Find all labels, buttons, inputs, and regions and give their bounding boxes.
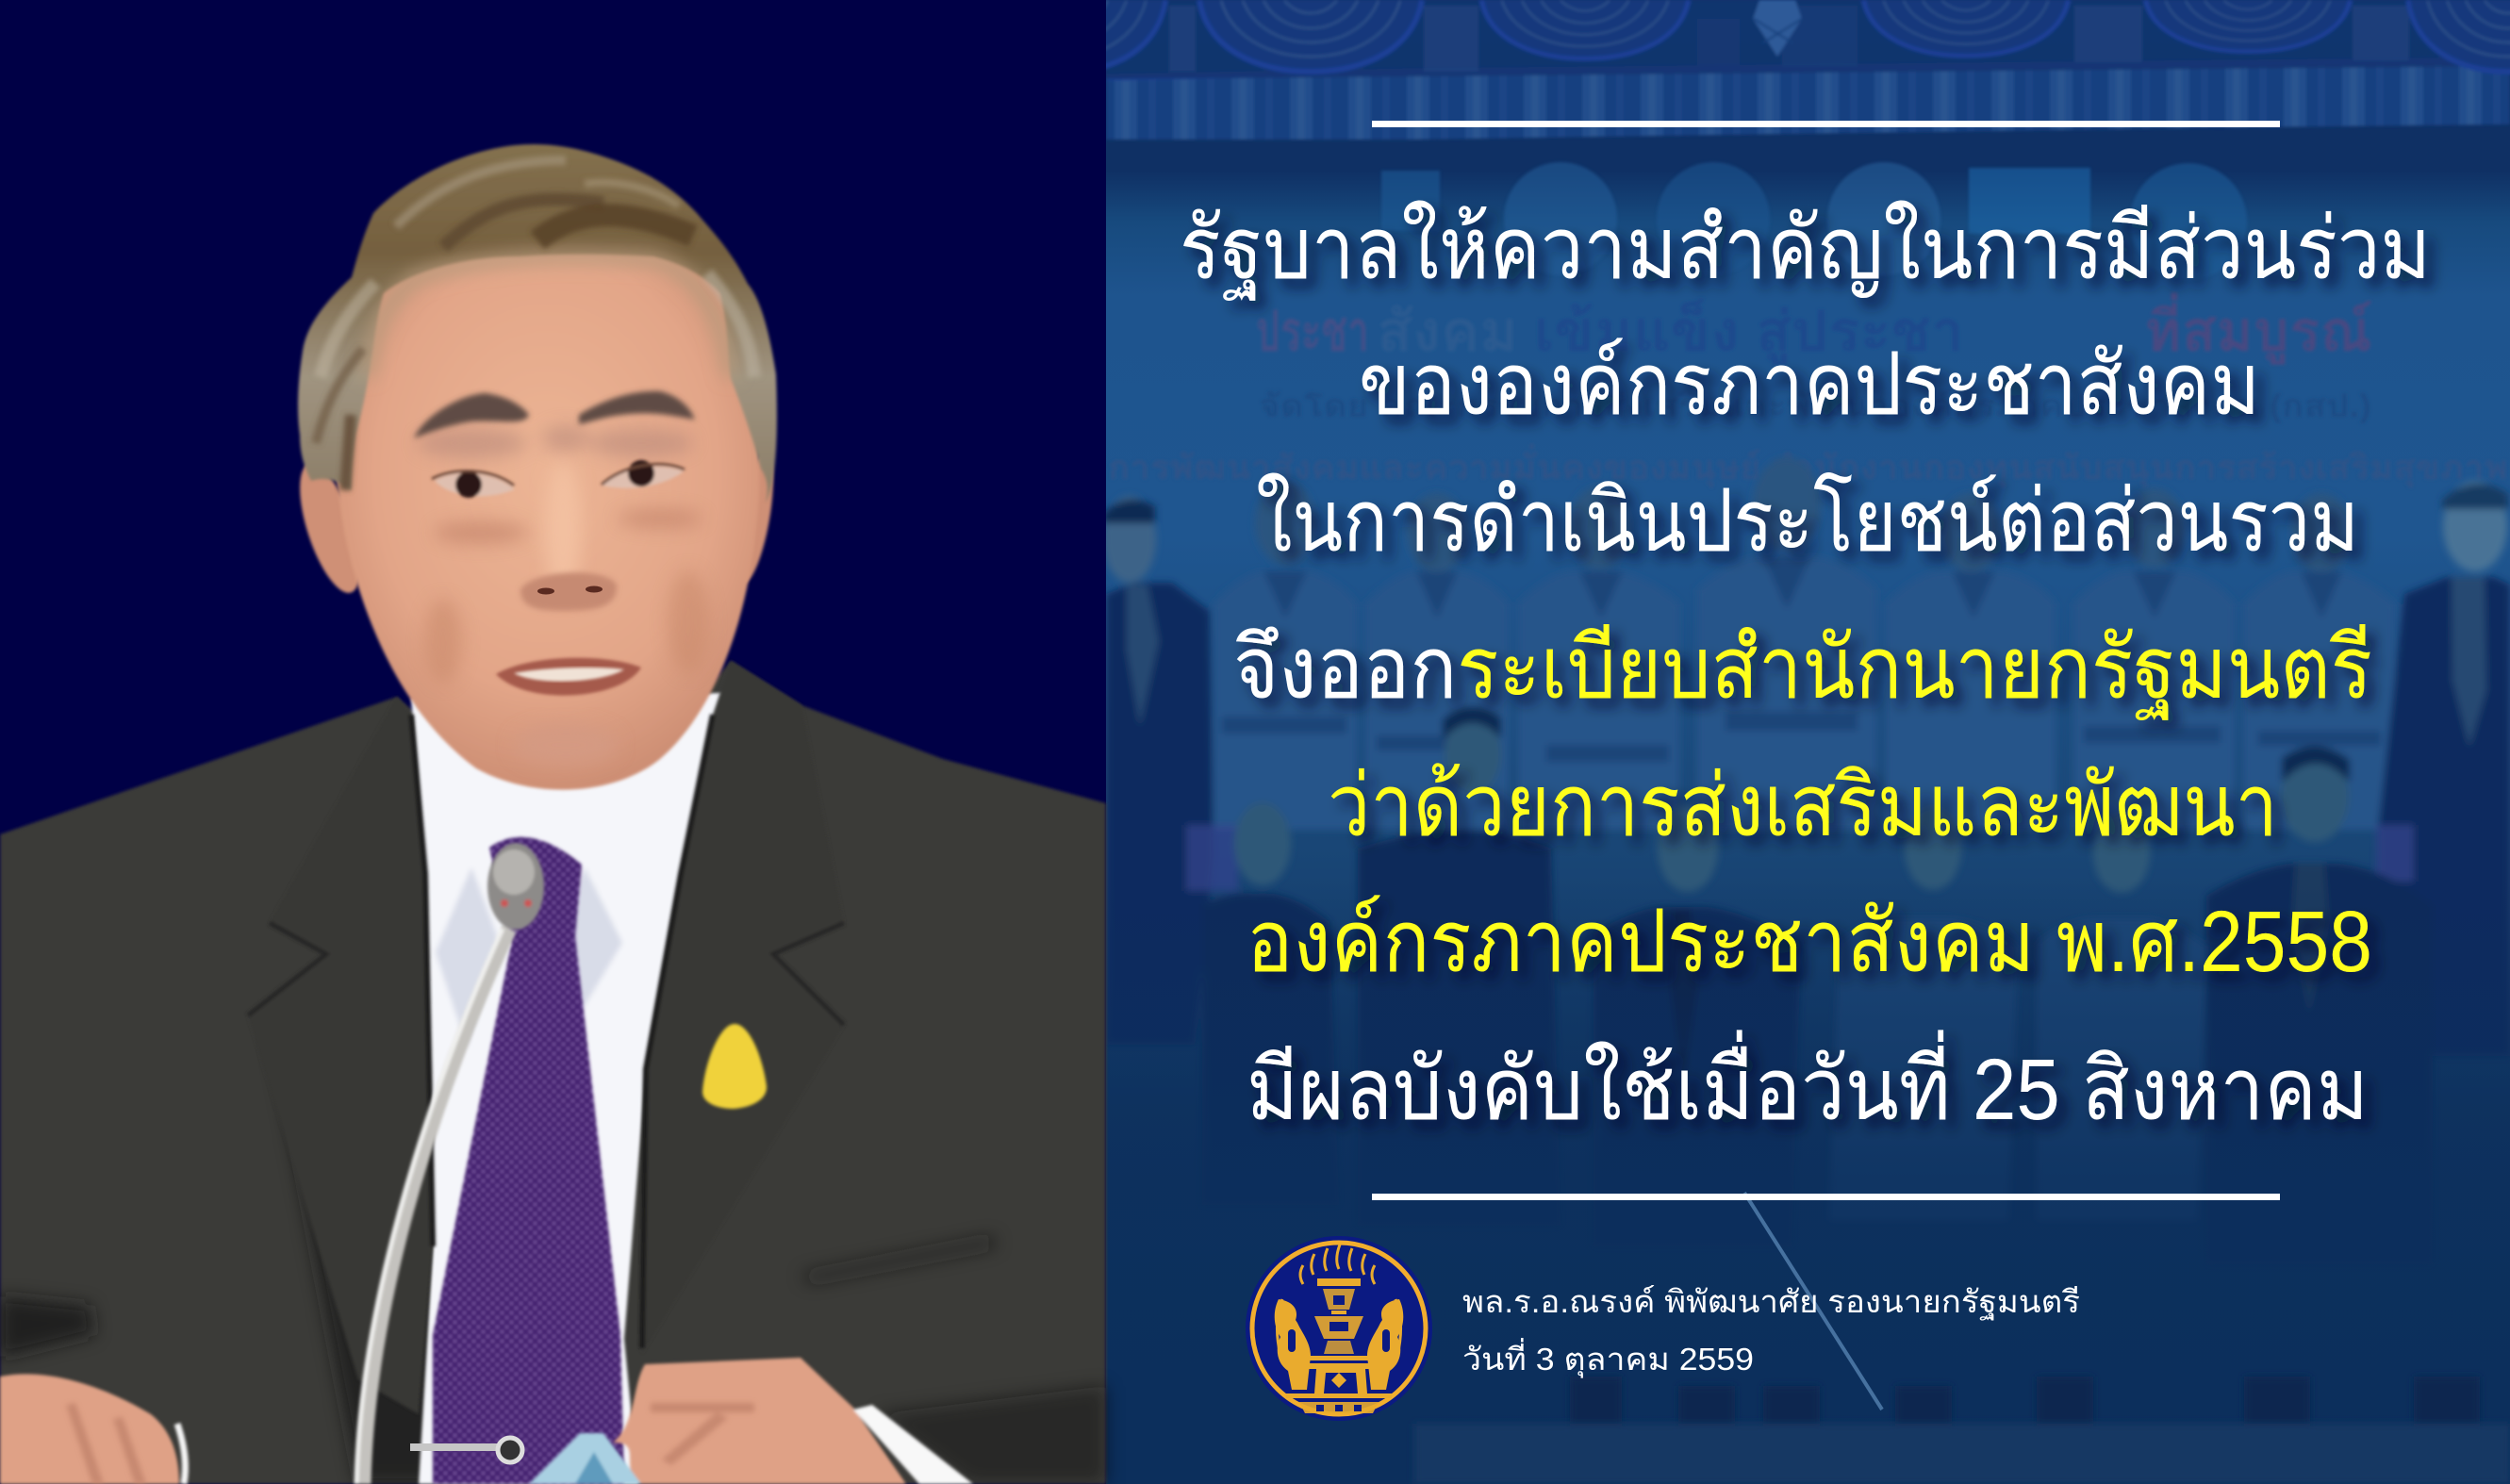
microphone [356,843,544,1484]
back row heads [1255,457,2352,572]
heading: main statement [1180,201,2431,1138]
icon: government seal [1246,1236,1432,1421]
banner text in photo: เข้มแข็ง สู่ประชา [1534,298,1964,365]
logos row [1381,162,2247,280]
hair [298,144,777,503]
eye sockets [417,425,702,544]
attribution date: วันที่ 3 ตุลาคม 2559 [1462,1338,1754,1378]
curtain [966,0,2510,140]
side men in dark suits [1106,583,1214,1045]
banner text in photo [1108,292,2508,488]
ears [288,451,781,600]
floor and feet [1414,1377,2510,1484]
jacket [0,661,1106,1484]
face [334,244,760,790]
people [1106,458,2510,1145]
panel: portrait background [0,0,1106,1484]
facial features [414,391,709,766]
photo: portrait of speaker [0,144,1106,1484]
bottom fade [1827,991,2203,1222]
hand creases [66,1403,754,1484]
lapels [248,661,844,1414]
purple backdrop patches [1186,825,1238,891]
banner text in photo: ประชา [1256,300,1369,363]
shirt collar shading [436,867,622,1047]
front row bodies [1201,829,2428,1062]
banner text in photo: ที่สมบูรณ์ [2144,292,2372,365]
banner text in photo: จัดโดย คณะกรรมการส่งเสริมและพัฒนาองค์กรภาคประชาสังคม (กสป.) [1259,387,2371,424]
panel: event photo background [966,0,2510,1484]
line 5: ว่าด้วยการส่งเสริมและพัฒนา [1328,758,2278,854]
divider: top rule [1372,121,2280,127]
eyebrows [414,393,529,438]
tie [433,837,624,1484]
divider: bottom rule [1372,1194,2280,1200]
line 6: องค์กรภาคประชาสังคม พ.ศ.2558 [1247,894,2372,990]
line 2: ขององค์กรภาคประชาสังคม [1359,337,2260,433]
cheek shade [424,570,709,684]
mouth [496,658,641,696]
jacket shadows [0,1037,1106,1484]
banner text in photo: การพัฒนาสังคมและความมั่นคงของมนุษย์ สำนักงานกองทุนสนับสนุนการสร้างเสริมสุขภาพ [1108,444,2508,488]
shirt [411,693,726,1484]
hair streaks [316,160,754,490]
line 3: ในการดำเนินประโยชน์ต่อส่วนรวม [1256,472,2359,569]
attribution name: พล.ร.อ.ณรงค์ พิพัฒนาศัย รองนายกรัฐมนตรี [1462,1284,2080,1321]
hands [0,1358,973,1484]
line 4: จึงออกระเบียบสำนักนายกรัฐมนตรี [1233,620,2372,721]
back row shirts [1214,557,2395,830]
hairline blend [368,256,731,377]
white cane [1744,1193,1882,1410]
tie clip [410,1443,509,1451]
pin [702,1024,767,1109]
line 7: มีผลบังคับใช้เมื่อวันที่ 25 สิงหาคม [1247,1030,2369,1138]
nose [544,462,582,594]
banner text in photo: สังคม [1377,300,1518,363]
eyes [432,460,685,498]
text block: attribution [1462,1284,2080,1378]
